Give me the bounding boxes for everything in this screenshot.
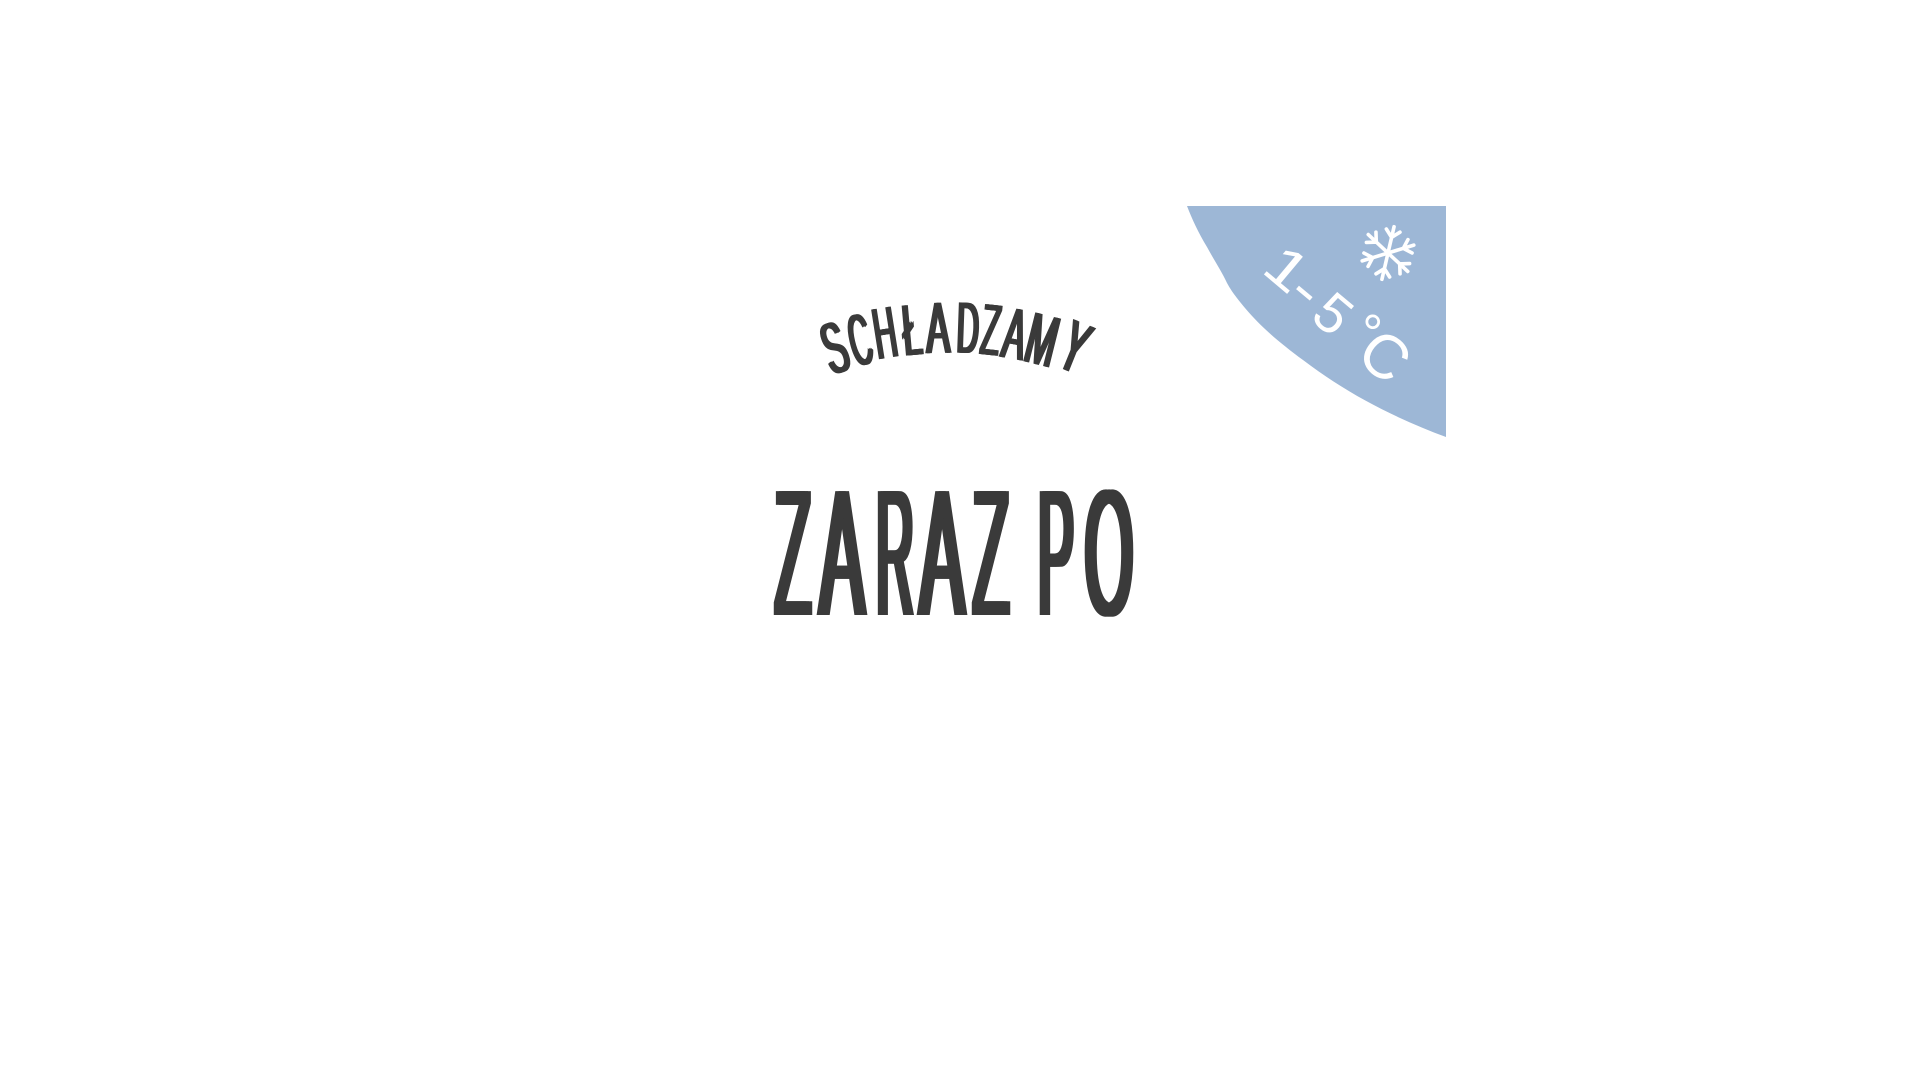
arched heading: A — [997, 292, 1033, 376]
arched heading: Z — [977, 289, 1005, 371]
arched heading: Ł — [899, 289, 925, 371]
temperature label — [1252, 232, 1424, 397]
main heading: Z — [775, 453, 811, 654]
arched heading: M — [1018, 297, 1066, 383]
main heading: O — [1085, 453, 1133, 654]
corner badge — [1187, 206, 1446, 437]
arched heading: C — [841, 298, 879, 382]
icon: snowflake — [1356, 221, 1420, 285]
main heading: Z — [973, 453, 1009, 654]
temperature label: 5 — [1301, 279, 1366, 348]
badge background — [1187, 206, 1446, 437]
temperature label: ° — [1338, 302, 1392, 360]
main heading: R — [876, 453, 914, 654]
arched heading: A — [926, 287, 950, 369]
main heading: A — [920, 453, 964, 654]
arched heading — [812, 287, 1101, 390]
main heading — [774, 453, 1134, 654]
temperature label: 1 — [1252, 232, 1322, 305]
temperature label: C — [1345, 316, 1424, 397]
arched heading: D — [956, 287, 980, 369]
temperature label: - — [1278, 258, 1337, 322]
main heading: A — [820, 453, 864, 654]
arched heading: Y — [1049, 305, 1101, 389]
arched heading: H — [868, 291, 902, 375]
main heading: P — [1038, 453, 1074, 654]
arched heading: S — [812, 306, 858, 390]
